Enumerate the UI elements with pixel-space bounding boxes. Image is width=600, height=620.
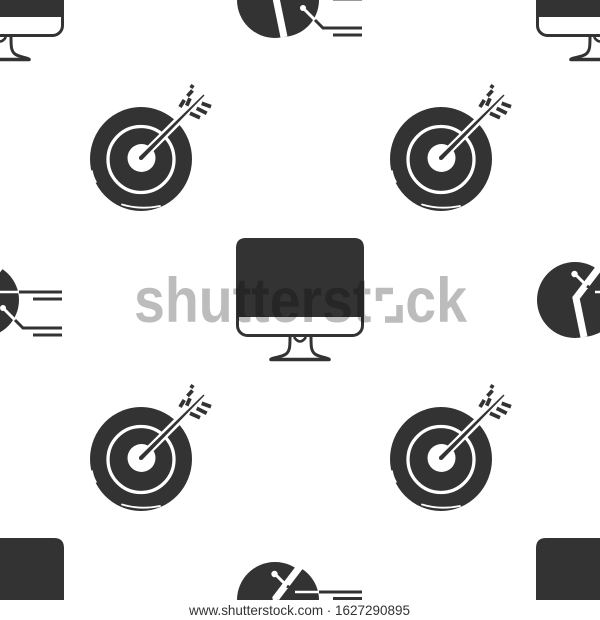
watermark: shutterstock [134, 266, 468, 336]
icon: pie chart, left edge [0, 243, 62, 338]
icon: monitor, top right [536, 0, 600, 60]
icon: pie chart, right edge [537, 243, 600, 338]
icon: pie chart, bottom centre [237, 562, 362, 600]
icon: monitor, bottom left [0, 538, 64, 600]
icon: target with arrow, top left [90, 85, 211, 211]
icon: monitor, top left [0, 0, 64, 60]
icon: monitor, centre [236, 238, 364, 360]
icon: target with arrow, top right [390, 85, 511, 211]
footer caption: www.shutterstock.com · 1627290895 [188, 602, 410, 618]
icon: target with arrow, bottom left [90, 385, 211, 511]
icon: pie chart, top centre [237, 0, 362, 38]
icon: target with arrow, bottom right [390, 385, 511, 511]
icon: monitor, bottom right [536, 538, 600, 600]
